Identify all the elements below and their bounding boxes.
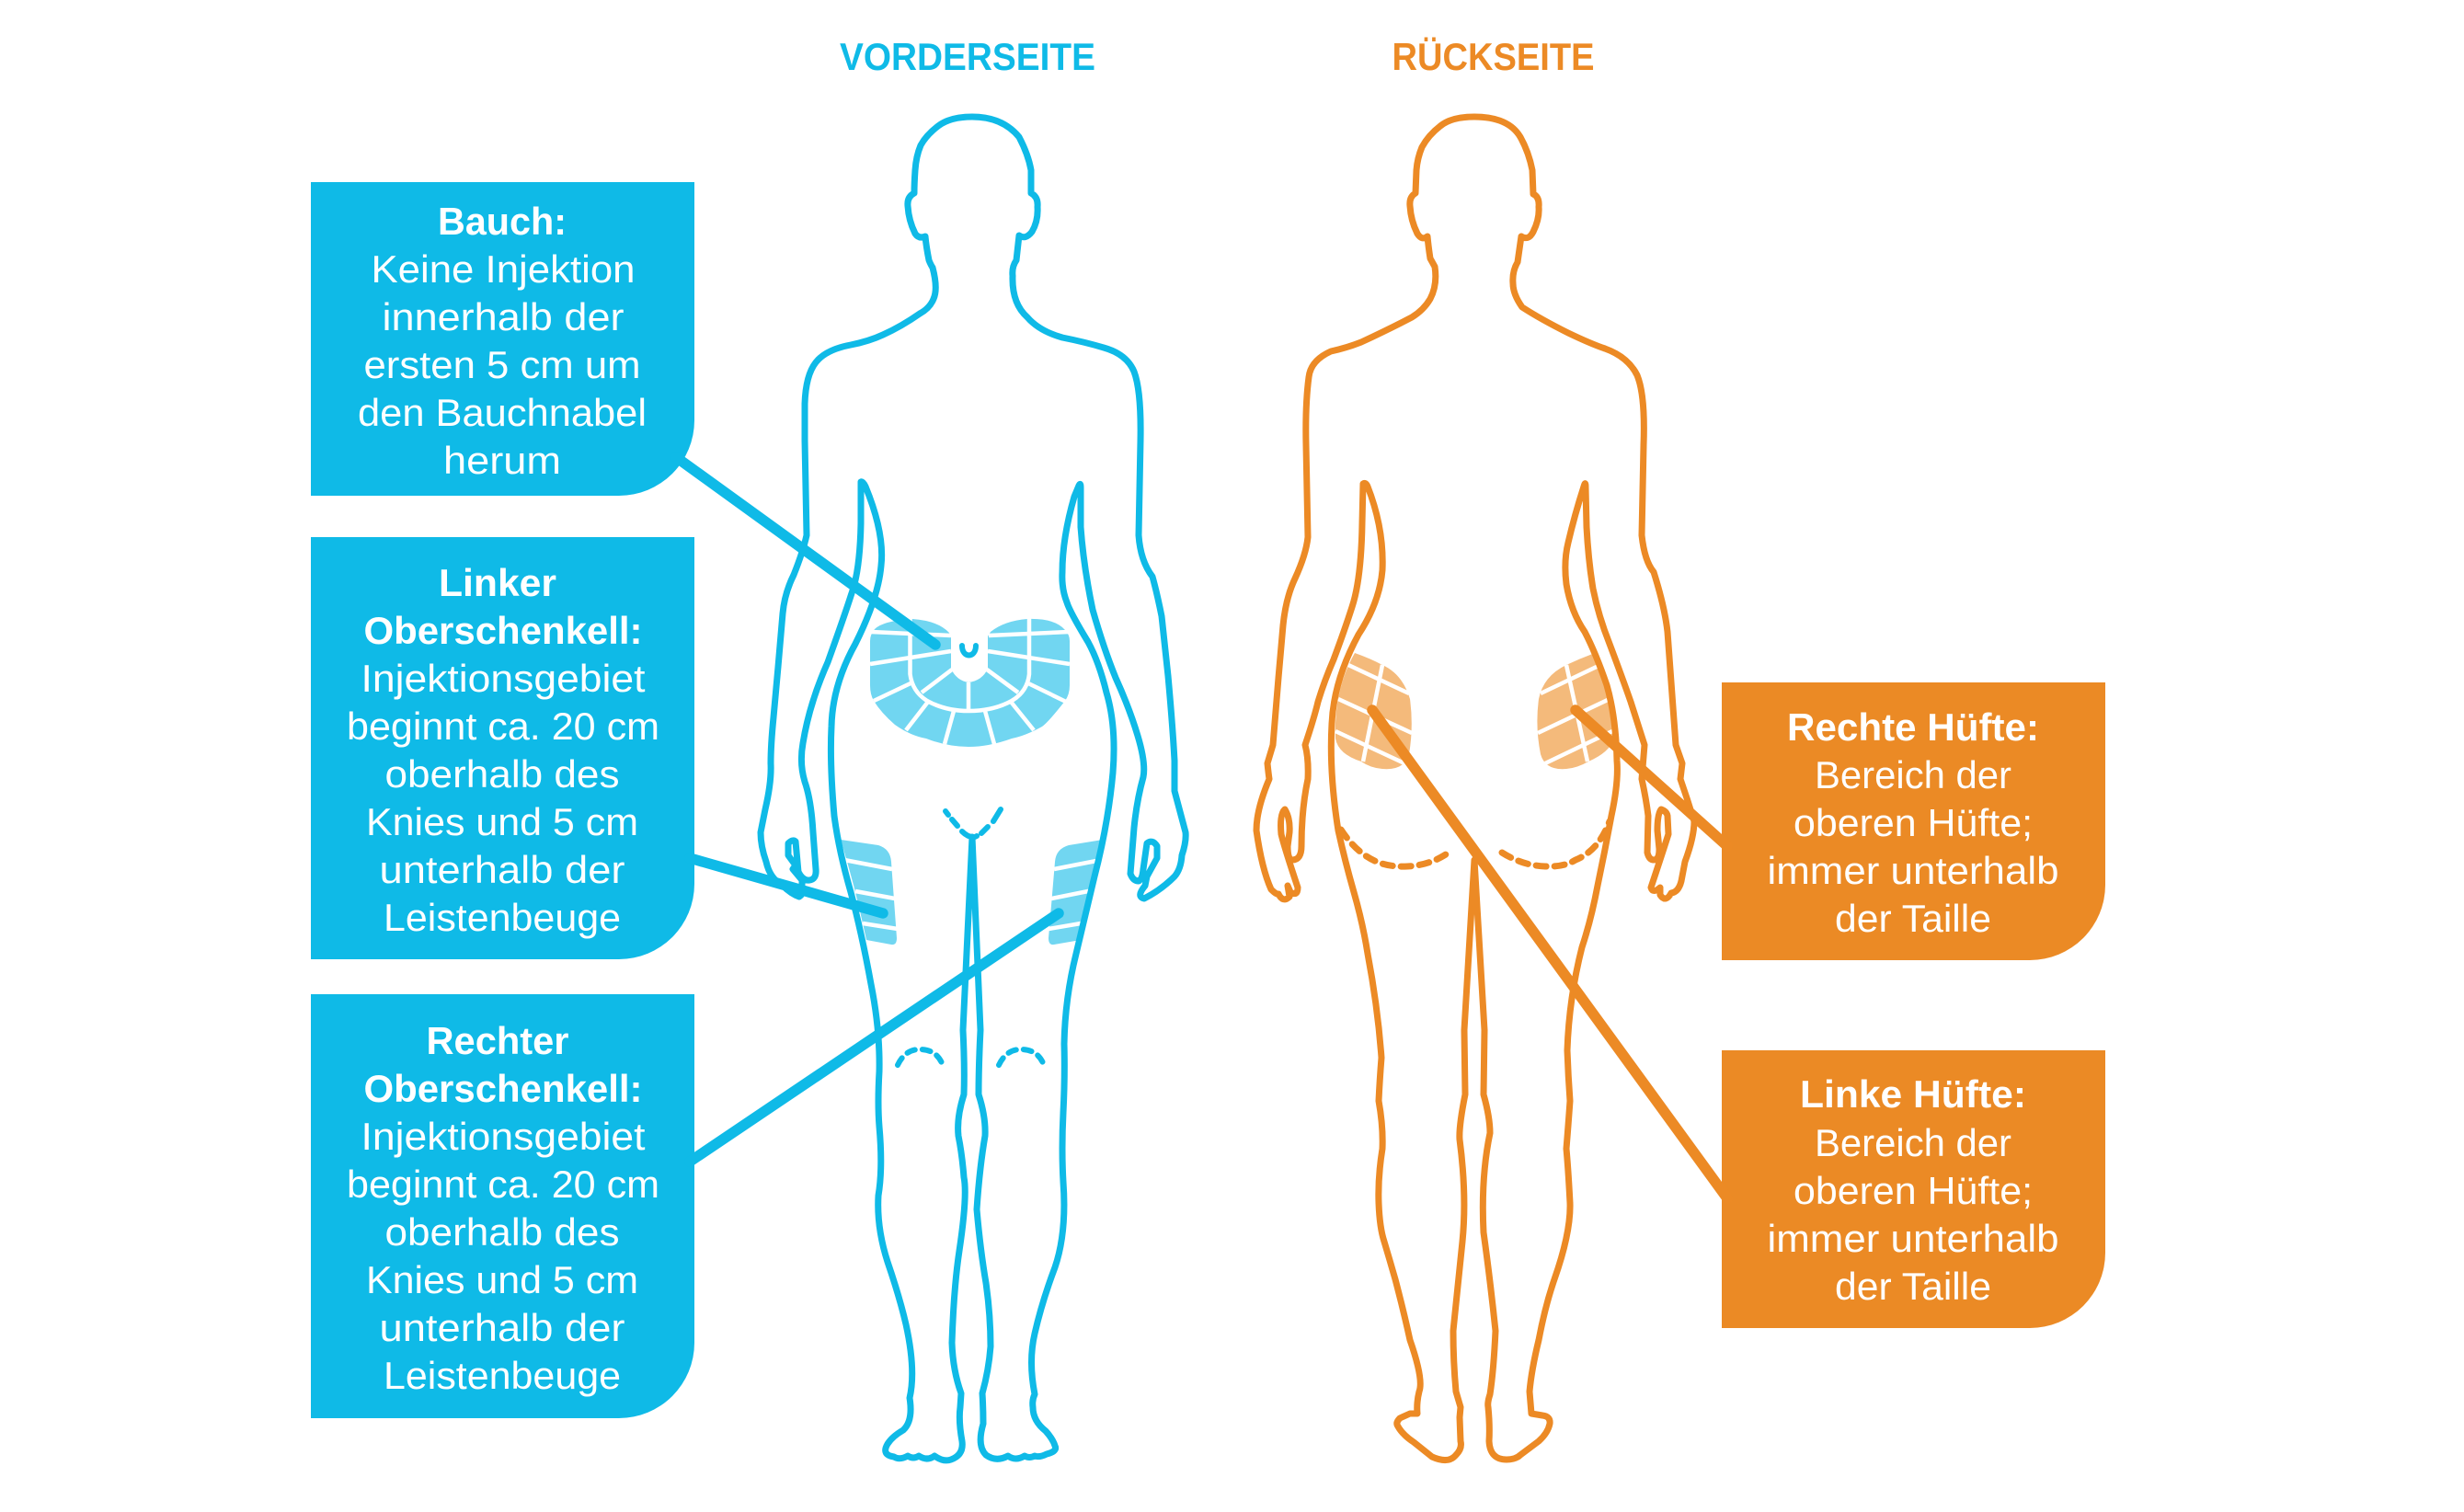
callout: Linke Hüfte: immer unterhalb xyxy=(1768,1217,2058,1260)
heading: Rückseite: RÜCKSEITE xyxy=(1392,35,1595,78)
callout: Rechter Oberschenkel: Rechter xyxy=(427,1019,568,1062)
figure: front view body xyxy=(761,117,1186,1460)
callout: Rechter Oberschenkel xyxy=(311,994,694,1418)
callout: Bauch: ersten 5 cm um xyxy=(364,343,640,386)
figure: back view body xyxy=(1256,117,1694,1460)
callout: Linke Hüfte xyxy=(1722,1050,2105,1328)
arrow: Bauch to abdomen xyxy=(676,457,935,645)
left knee dashed arc xyxy=(898,1049,944,1068)
callout: Rechter Oberschenkel: oberhalb des xyxy=(384,1210,620,1254)
callout: Bauch: herum xyxy=(443,439,561,482)
callout: Bauch: Keine Injektion xyxy=(372,247,635,291)
callout: Rechte Hüfte: Bereich der xyxy=(1815,753,2011,796)
callout: Linker Oberschenkel: unterhalb der xyxy=(379,848,625,891)
body outline front xyxy=(761,117,1186,1460)
injection zone: left thigh xyxy=(841,840,898,945)
callout: Linke Hüfte: oberen Hüfte; xyxy=(1794,1169,2033,1212)
body outline back xyxy=(1256,117,1694,1460)
callout: Rechter Oberschenkel: Knies und 5 cm xyxy=(366,1258,638,1301)
callout: Linker Oberschenkel: Knies und 5 cm xyxy=(366,800,638,843)
callout: Rechte Hüfte: immer unterhalb xyxy=(1768,849,2058,892)
callout: Rechte Hüfte xyxy=(1722,682,2105,960)
navel xyxy=(962,646,976,655)
callout: Linker Oberschenkel: Injektionsgebiet xyxy=(361,657,646,700)
injection zone: right thigh xyxy=(1049,840,1103,945)
injection zone: right hip xyxy=(1537,653,1614,769)
right buttock dashed crease xyxy=(1502,821,1610,866)
callout: Linker Oberschenkel xyxy=(311,537,694,959)
callout: Rechter Oberschenkel: Oberschenkell: xyxy=(364,1067,642,1110)
callout: Linke Hüfte: Bereich der xyxy=(1815,1121,2011,1164)
callout: Rechte Hüfte: der Taille xyxy=(1835,897,1991,940)
callout: Linker Oberschenkel: oberhalb des xyxy=(384,752,620,796)
callout: Bauch: innerhalb der xyxy=(383,295,625,338)
callout: Rechter Oberschenkel: Leistenbeuge xyxy=(384,1354,621,1397)
callout: Linker Oberschenkel: Oberschenkell: xyxy=(364,609,642,652)
callout: Linker Oberschenkel: beginnt ca. 20 cm xyxy=(347,704,659,748)
callout: Bauch: Bauch: xyxy=(438,200,567,243)
arrow: left hip xyxy=(1372,710,1727,1198)
arrow: left thigh xyxy=(690,858,883,913)
injection zone: left hip xyxy=(1335,653,1412,769)
callout: Bauch xyxy=(311,182,694,496)
groin dashed line xyxy=(945,809,1001,837)
injection zone: abdomen xyxy=(870,618,1070,747)
callout: Rechter Oberschenkel: Injektionsgebiet xyxy=(361,1115,646,1158)
right knee dashed arc xyxy=(999,1049,1045,1068)
callout: Rechte Hüfte: Rechte Hüfte: xyxy=(1787,705,2039,749)
callout: Linker Oberschenkel: Linker xyxy=(439,561,556,604)
arrow: right thigh xyxy=(690,913,1059,1162)
callout: Linke Hüfte: der Taille xyxy=(1835,1265,1991,1308)
callout: Rechter Oberschenkel: unterhalb der xyxy=(379,1306,625,1349)
callout: Linker Oberschenkel: Leistenbeuge xyxy=(384,896,621,939)
callout: Linke Hüfte: Linke Hüfte: xyxy=(1800,1072,2026,1116)
left buttock dashed crease xyxy=(1341,830,1446,866)
callout: Rechte Hüfte: oberen Hüfte; xyxy=(1794,801,2033,844)
heading: Vorderseite: VORDERSEITE xyxy=(840,35,1095,78)
callout: Rechter Oberschenkel: beginnt ca. 20 cm xyxy=(347,1163,659,1206)
arrow: right hip xyxy=(1576,710,1727,846)
callout: Bauch: den Bauchnabel xyxy=(358,391,647,434)
